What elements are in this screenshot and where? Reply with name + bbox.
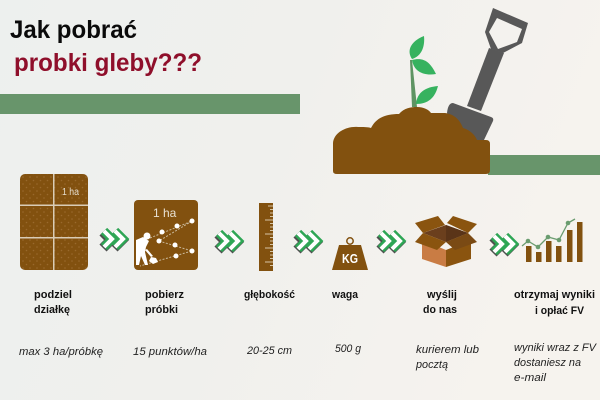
arrow 1: [103, 231, 123, 248]
icon: person digging: [136, 232, 158, 265]
step 6 text: i opłać FV: [535, 305, 585, 317]
step 6 text: wyniki wraz z FV: [514, 342, 598, 354]
step 1 text: działkę: [34, 304, 70, 316]
icon: sampling points: 1 ha: [153, 206, 177, 220]
step 5 text: kurierem lub: [416, 344, 479, 356]
step 6 text: dostaniesz na: [514, 357, 581, 369]
icon: results chart: [522, 219, 582, 262]
step 4 text: 500 g: [335, 343, 362, 355]
step 2 text: pobierz: [145, 289, 184, 301]
illustration: soil, seedling and shovel: [333, 8, 528, 174]
icon: open box: [415, 216, 477, 267]
icon: divided field: 1 ha: [62, 187, 79, 198]
arrow 2: [218, 233, 238, 250]
step 6 text: e-mail: [514, 372, 547, 384]
icon: shovel: [447, 8, 528, 140]
step 4 text: waga: [331, 289, 359, 301]
step 1 text: podziel: [34, 289, 72, 301]
step 5 text: pocztą: [415, 359, 448, 371]
step 6 text: otrzymaj wyniki: [514, 289, 595, 301]
step 1 text: [19, 289, 103, 358]
step 3 text: głębokość: [244, 289, 295, 301]
step 2 text: 15 punktów/ha: [133, 346, 207, 358]
title: [10, 16, 202, 77]
icon: weight: [332, 238, 368, 270]
title: Jak pobrać: [10, 16, 137, 44]
icon: soil mound: [333, 107, 490, 174]
icon: sampling points: [134, 200, 198, 270]
step 2 text: [133, 289, 207, 358]
title: probki gleby???: [14, 49, 202, 77]
arrow 4: [380, 233, 400, 250]
step 5 text: wyślij: [426, 289, 457, 301]
step 1 text: max 3 ha/próbkę: [19, 346, 103, 358]
step 4 text: [331, 289, 362, 355]
icon: seedling: [410, 36, 438, 107]
icon: weight: KG: [342, 251, 358, 266]
green bar left: [0, 94, 300, 114]
icon: divided field: [20, 174, 88, 270]
arrow 3: [297, 233, 317, 250]
step 5 text: do nas: [423, 304, 457, 316]
icon: ruler: [259, 203, 273, 271]
step 5 text: [415, 289, 479, 371]
arrow 5: [493, 236, 513, 253]
green bar right: [488, 155, 600, 175]
step 2 text: próbki: [145, 304, 178, 316]
step 3 text: [244, 289, 295, 357]
step 3 text: 20-25 cm: [246, 345, 292, 357]
step 6 text: [514, 289, 598, 384]
